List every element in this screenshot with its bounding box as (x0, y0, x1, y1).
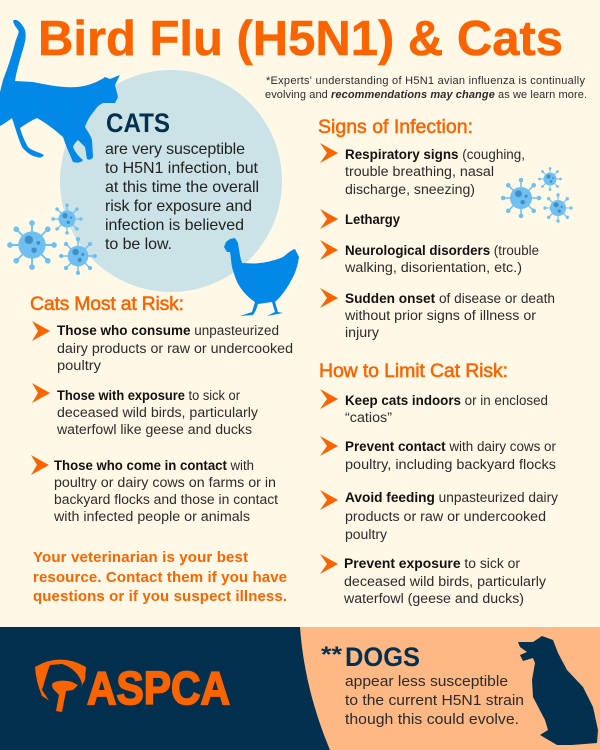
arrow (320, 240, 338, 260)
item: neurological: Neurological disorders (trouble (345, 243, 539, 258)
heading: cats most at risk: Cats Most at Risk: (30, 293, 184, 315)
cats description: to be low. (105, 236, 172, 253)
item: prevent exposure: deceased wild birds, particularly (344, 574, 546, 589)
item: avoid feeding: poultry (345, 527, 387, 542)
dogs description: to the current H5N1 strain (345, 693, 524, 709)
item: prevent contact (345, 439, 556, 472)
item: indoors: “catios” (345, 410, 392, 425)
heading: dogs: DOGS (345, 642, 420, 672)
item: sudden onset: without prior signs of illness or (344, 308, 537, 323)
arrow (320, 209, 338, 229)
dogs description: appear less susceptible (345, 674, 508, 690)
icon: dog silhouette (518, 636, 598, 745)
footnote: evolving and recommendations may change as we learn more. (265, 89, 587, 101)
item: indoors: Keep cats indoors or in enclosed (345, 393, 548, 408)
cats description: to H5N1 infection, but (105, 160, 259, 177)
item: exposure (56, 388, 258, 437)
item: sudden onset: injury (345, 325, 379, 340)
item: contact: Those who come in contact with (54, 458, 254, 473)
item: indoors (345, 393, 548, 425)
item: lethargy: Lethargy (345, 212, 400, 227)
item: exposure: deceased wild birds, particularly (57, 405, 258, 420)
cats description (105, 141, 259, 253)
list: signs of infection (320, 143, 555, 340)
arrow (320, 436, 338, 456)
arrow (320, 389, 338, 409)
icon: virus group right (502, 168, 572, 222)
item: consume: poultry (57, 358, 101, 373)
icon: virus group left (8, 204, 96, 274)
cats description: risk for exposure and (105, 198, 252, 215)
title: Bird Flu (H5N1) & Cats (38, 12, 563, 66)
arrow (32, 321, 50, 341)
item: sudden onset (344, 291, 555, 340)
item: consume: dairy products or raw or undercooked (57, 341, 293, 356)
item: avoid feeding: products or raw or undercooked (345, 509, 546, 524)
item: exposure: Those with exposure to sick or (57, 388, 240, 403)
panel: dogs (300, 627, 600, 750)
item: contact: poultry or dairy cows on farms or in (54, 475, 276, 490)
arrow (320, 554, 338, 574)
item: respiratory: discharge, sneezing) (345, 182, 475, 197)
heading: signs of infection: Signs of Infection: (318, 116, 473, 138)
item: contact: with infected people or animals (53, 509, 250, 524)
callout: veterinarian: Your veterinarian is your best (33, 549, 248, 566)
cats description: at this time the overall (105, 179, 259, 196)
callout: veterinarian (33, 549, 287, 605)
arrow (32, 383, 50, 403)
item: contact: backyard flocks and those in contact (54, 492, 278, 507)
arrow (320, 143, 338, 163)
callout: veterinarian: resource. Contact them if you have (33, 569, 287, 586)
wordmark: ASPCA (87, 662, 230, 714)
arrow (31, 455, 49, 475)
icon: chicken (224, 238, 299, 316)
item: neurological (344, 243, 539, 275)
list: cats most at risk (31, 321, 293, 524)
item: prevent exposure: Prevent exposure to sick or (344, 556, 521, 571)
list: how to limit cat risk (320, 389, 558, 606)
heading: how to limit cat risk: How to Limit Cat Risk: (319, 360, 508, 382)
footer band (0, 627, 600, 750)
item: respiratory: trouble breathing, nasal (345, 164, 494, 179)
heading: cats: CATS (106, 108, 170, 138)
footnote (265, 75, 587, 101)
cats description: infection is believed (105, 217, 244, 234)
item: prevent exposure: waterfowl (geese and ducks) (343, 591, 524, 606)
item: consume (57, 323, 293, 373)
cats description: are very susceptible (105, 141, 245, 158)
item: exposure: waterfowl like geese and ducks (56, 422, 252, 437)
panel: cats circle (60, 70, 282, 292)
item: prevent exposure (343, 556, 546, 606)
item: respiratory: Respiratory signs (coughing, (345, 147, 525, 162)
item: contact (53, 458, 278, 524)
footnote: *Experts' understanding of H5N1 avian influenza is continually (266, 75, 586, 87)
item: respiratory (345, 147, 525, 197)
arrow (320, 490, 338, 510)
item: prevent contact: poultry, including backyard flocks (345, 457, 556, 472)
icon: shield (35, 660, 86, 712)
icon: cat silhouette (0, 20, 120, 163)
logo: ASPCA (35, 660, 230, 714)
item: neurological: walking, disorientation, etc.) (344, 260, 522, 275)
callout: veterinarian: questions or if you suspect illness. (33, 588, 287, 605)
item: avoid feeding: Avoid feeding unpasteurized dairy (345, 490, 558, 505)
arrow (320, 288, 338, 308)
item: sudden onset: Sudden onset of disease or death (345, 291, 555, 306)
item: prevent contact: Prevent contact with dairy cows or (345, 439, 556, 454)
heading: dogs: ** (321, 642, 343, 667)
item: avoid feeding (345, 490, 558, 542)
dogs description (345, 674, 524, 728)
dogs description: though this could evolve. (345, 712, 519, 728)
item: consume: Those who consume unpasteurized (57, 323, 279, 338)
